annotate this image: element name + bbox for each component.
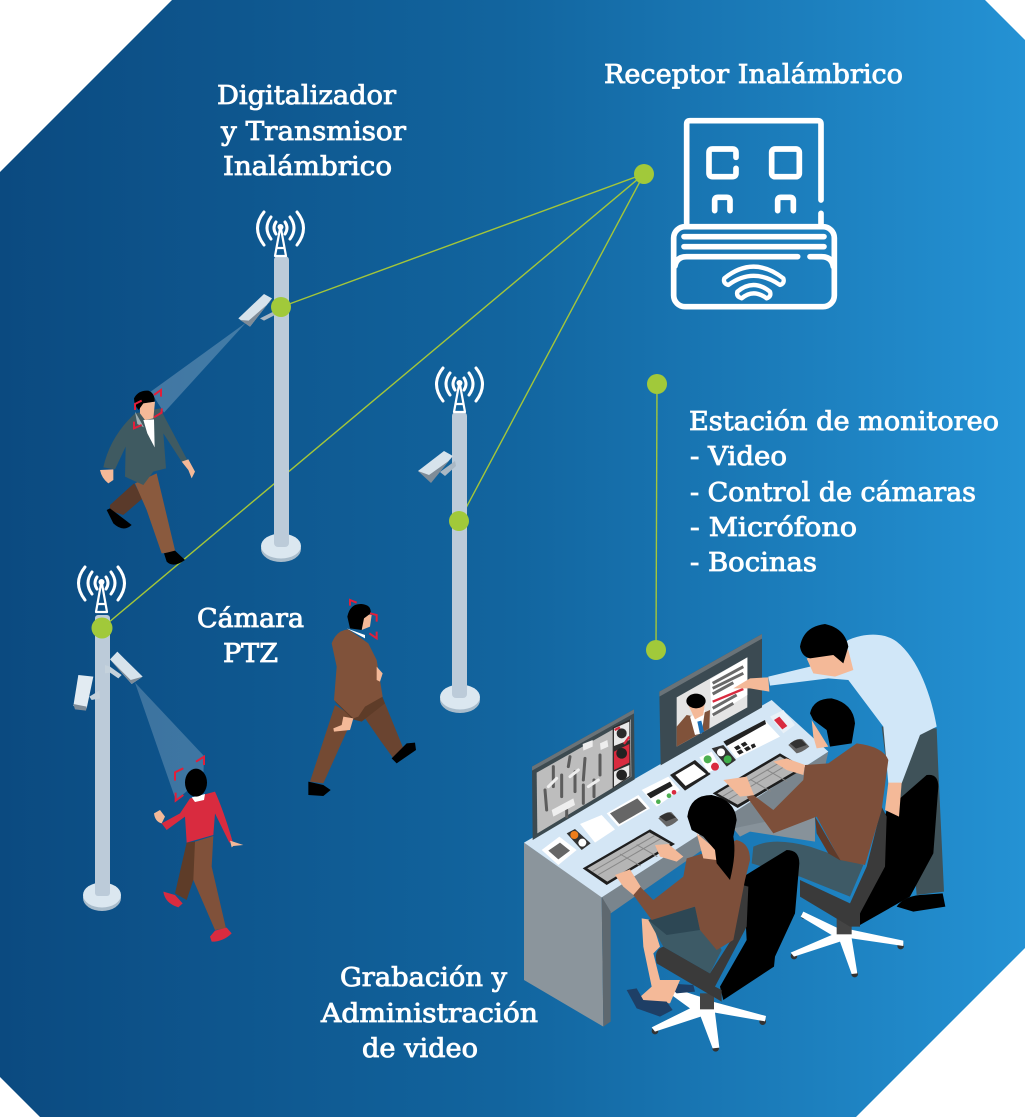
cameras on pole 3	[73, 600, 416, 942]
label: receptor inalambrico: Receptor Inalámbrico	[604, 60, 903, 90]
right monitor	[659, 634, 762, 765]
label: estacion de monitoreo: - Control de cámaras	[690, 478, 976, 508]
woman in red	[154, 757, 243, 942]
fixed camera lower	[73, 675, 100, 711]
green connection nodes	[92, 164, 667, 660]
label: estacion de monitoreo: - Video	[690, 442, 787, 472]
desk	[524, 700, 828, 1027]
label: digitalizador y transmisor: y Transmisor	[220, 117, 407, 147]
chair back front	[656, 850, 799, 1002]
standing man trousers	[882, 727, 945, 912]
man in brown walking	[308, 600, 416, 796]
pole 1 with antenna	[258, 212, 304, 562]
camera beam	[135, 683, 204, 801]
chair base right	[791, 912, 904, 977]
camera beam	[151, 323, 246, 413]
label: grabacion y administracion: Administración	[320, 999, 538, 1029]
label: estacion de monitoreo: - Bocinas	[690, 548, 817, 578]
standing man hand on chair	[885, 783, 902, 817]
connection lines	[102, 174, 657, 650]
PTZ camera upper	[105, 652, 143, 684]
monitoring station	[524, 624, 945, 1052]
woman legs	[627, 918, 695, 1017]
standing man torso	[733, 624, 937, 783]
person	[100, 390, 195, 565]
keyboards	[583, 753, 805, 885]
camera on pole 2	[418, 451, 456, 483]
camera	[238, 294, 275, 327]
chair base front	[652, 987, 766, 1052]
label: grabacion y administracion: Grabación y	[340, 963, 507, 993]
pole 2 with antenna	[436, 368, 482, 713]
seated woman	[615, 795, 750, 973]
label: camara ptz: PTZ	[223, 639, 278, 669]
label: estacion de monitoreo: - Micrófono	[690, 513, 857, 543]
chair back right	[800, 775, 938, 927]
seated man	[723, 698, 888, 897]
console controls	[542, 710, 809, 865]
label: camara ptz: Cámara	[197, 604, 304, 634]
left monitor	[532, 709, 635, 840]
label: digitalizador y transmisor: Digitalizador	[217, 81, 397, 111]
man walking with camera beam	[100, 294, 275, 565]
pole 3 with antenna	[78, 567, 124, 911]
receiver icon	[674, 121, 834, 307]
label: digitalizador y transmisor: Inalámbrico	[223, 152, 392, 182]
label: estacion de monitoreo: Estación de monitoreo	[689, 407, 999, 437]
label: grabacion y administracion: de video	[362, 1034, 478, 1064]
